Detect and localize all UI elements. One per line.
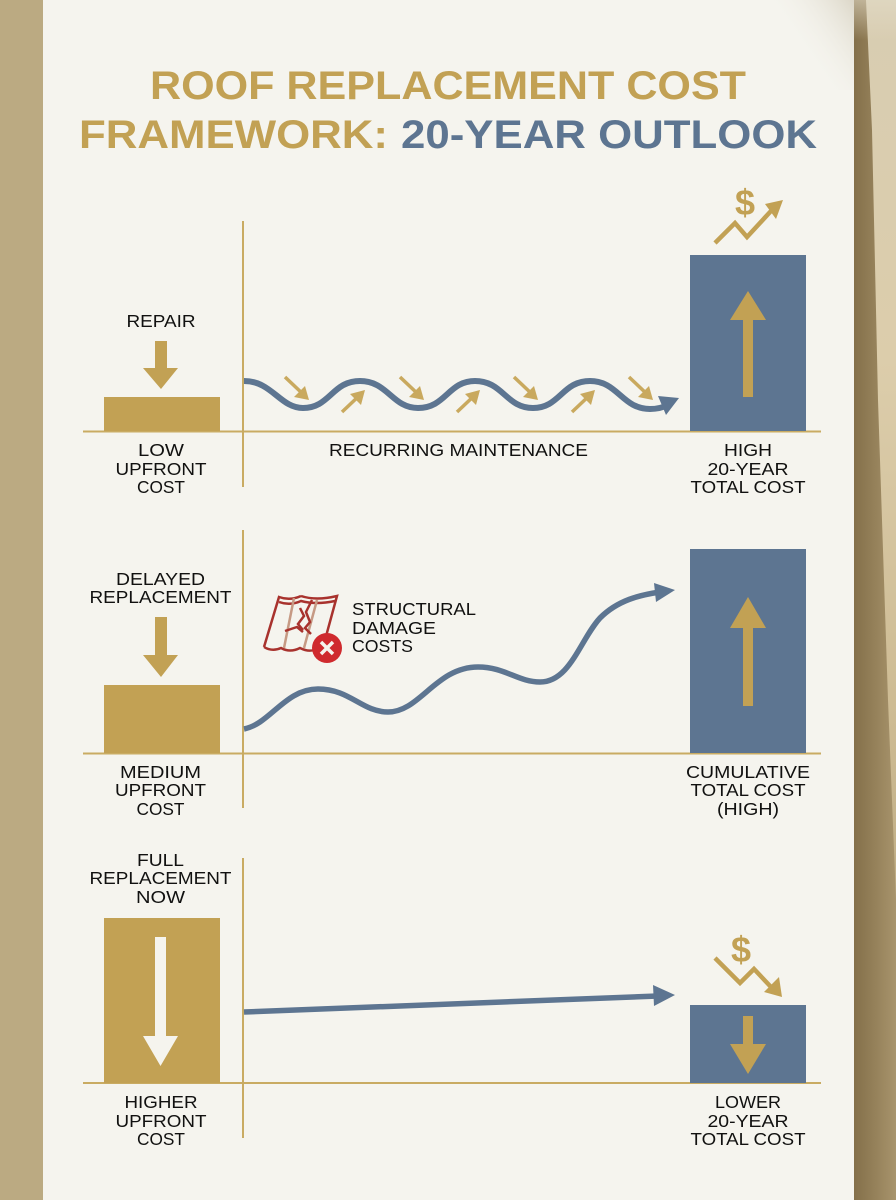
label: low upfront cost: LOW [138, 440, 185, 460]
label: medium upfront cost: MEDIUM [120, 762, 201, 782]
arrow: repair down [143, 341, 178, 389]
label: structural damage costs: STRUCTURAL [352, 599, 476, 619]
axes [83, 858, 821, 1138]
label: repair: REPAIR [126, 311, 196, 331]
label: higher upfront cost: HIGHER [124, 1092, 198, 1112]
label: structural damage costs: COSTS [352, 636, 413, 656]
label: cumulative total cost [686, 762, 810, 819]
bar: high total cost [690, 255, 806, 431]
label: full replacement now: FULL [137, 850, 184, 870]
icon: red x badge [312, 633, 342, 663]
icon: dollar rising [715, 182, 783, 243]
label: delayed replacement: DELAYED [116, 569, 205, 589]
panel: delayed replacement [83, 530, 821, 819]
label: delayed replacement: REPLACEMENT [90, 587, 232, 607]
label: lower total cost: 20-YEAR [708, 1111, 788, 1131]
label: higher upfront cost: UPFRONT [116, 1111, 207, 1131]
title: 20-YEAR OUTLOOK [401, 113, 817, 157]
bar: lower total cost [690, 1005, 806, 1083]
axes [83, 530, 821, 808]
label: medium upfront cost [115, 762, 206, 819]
arrow: down in bar [143, 937, 178, 1066]
small maintenance arrows [285, 377, 653, 412]
flat cost arrow [244, 985, 675, 1012]
label: low upfront cost: UPFRONT [116, 459, 207, 479]
arrow: up in bar [730, 597, 766, 706]
icon: dollar falling [715, 929, 782, 997]
bar: low upfront cost [104, 397, 220, 431]
label: low upfront cost [116, 440, 207, 497]
label: lower total cost: TOTAL COST [690, 1129, 806, 1149]
label: full replacement now: NOW [136, 887, 186, 907]
bar: cumulative total cost [690, 549, 806, 753]
arrow: delayed down [143, 617, 178, 677]
label: delayed replacement [90, 569, 232, 607]
title: FRAMEWORK: [79, 113, 388, 157]
panel: full replacement now [83, 850, 821, 1149]
label: high total cost: 20-YEAR [708, 459, 788, 479]
arrow: up in bar [730, 291, 766, 397]
label: cumulative total cost: TOTAL COST [690, 780, 806, 800]
label: full replacement now: REPLACEMENT [90, 868, 232, 888]
title [79, 64, 817, 157]
title: ROOF REPLACEMENT COST [150, 64, 746, 108]
arrow: down in bar [730, 1016, 766, 1074]
label: cumulative total cost: CUMULATIVE [686, 762, 810, 782]
label: structural damage costs [352, 599, 476, 656]
rising cost curve [244, 583, 675, 729]
label: lower total cost: LOWER [715, 1092, 781, 1112]
label: low upfront cost: COST [137, 477, 185, 497]
label: high total cost [690, 440, 806, 497]
label: recurring maintenance: RECURRING MAINTENANCE [329, 440, 588, 460]
bar: medium upfront cost [104, 685, 220, 753]
axes [83, 221, 821, 487]
icon: dollar rising: $ [735, 182, 755, 223]
label: structural damage costs: DAMAGE [352, 618, 436, 638]
label: medium upfront cost: UPFRONT [115, 780, 206, 800]
icon: damaged shingles [264, 596, 342, 663]
icon: dollar falling: $ [731, 929, 751, 970]
label: higher upfront cost: COST [137, 1129, 185, 1149]
label: higher upfront cost [116, 1092, 207, 1149]
label: full replacement now [90, 850, 232, 907]
label: cumulative total cost: (HIGH) [717, 799, 779, 819]
bar: higher upfront cost [104, 918, 220, 1083]
label: lower total cost [690, 1092, 806, 1149]
wavy maintenance line [244, 381, 679, 415]
label: medium upfront cost: COST [136, 799, 185, 819]
label: high total cost: TOTAL COST [690, 477, 806, 497]
panel: repair [83, 182, 821, 497]
label: high total cost: HIGH [724, 440, 772, 460]
